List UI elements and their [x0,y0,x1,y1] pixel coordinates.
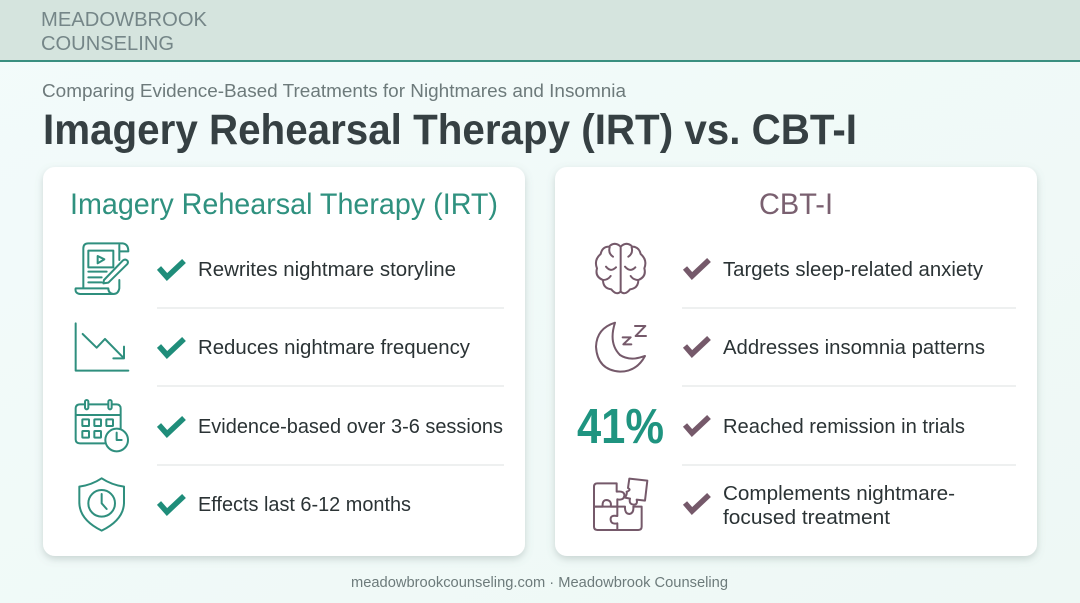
targets text: Targets sleep-related anxiety [723,259,983,281]
complements text: focused treatment [723,507,890,529]
IRT heading: Imagery Rehearsal Therapy (IRT) [70,188,498,221]
icon: calendar with clock [76,400,128,451]
check: evidence [159,418,184,434]
icon: brain [596,244,645,293]
logo wordmark [41,9,208,55]
rewrites text: Rewrites nightmare storyline [198,259,456,281]
reduces text: Reduces nightmare frequency [198,337,470,359]
CBT-I heading: CBT-I [759,188,833,221]
addresses text: Addresses insomnia patterns [723,337,985,359]
subtitle: Comparing Evidence-Based Treatments for Nightmares and Insomnia [42,81,627,101]
reached text: Reached remission in trials [723,416,965,438]
logo wordmark: COUNSELING [41,33,174,55]
icon: script with pencil [76,243,128,294]
icon: declining chart [76,323,128,371]
check: rewrites [159,261,184,277]
complements text [723,483,955,529]
check: addresses [685,338,709,354]
header band [0,0,1080,62]
panel: CBT-I [555,167,1037,556]
evidence text: Evidence-based over 3-6 sessions [198,416,503,438]
logo wordmark: MEADOWBROOK [41,9,208,31]
check: targets [685,260,709,276]
icon: crescent moon with z letters [596,323,646,372]
check: complements [685,495,709,511]
complements text: Complements nightmare- [723,483,955,505]
stat: 41 percent: 41% [577,400,664,454]
panel: IRT [43,167,525,556]
check: reached [685,417,709,433]
footer: meadowbrookcounseling.com · Meadowbrook Counseling [351,575,728,591]
check: effects [159,496,184,512]
icon: shield with clock [79,478,124,531]
effects text: Effects last 6-12 months [198,494,411,516]
title: Imagery Rehearsal Therapy (IRT) vs. CBT-I [43,107,857,154]
check: reduces [159,339,184,355]
icon: puzzle [594,479,647,530]
